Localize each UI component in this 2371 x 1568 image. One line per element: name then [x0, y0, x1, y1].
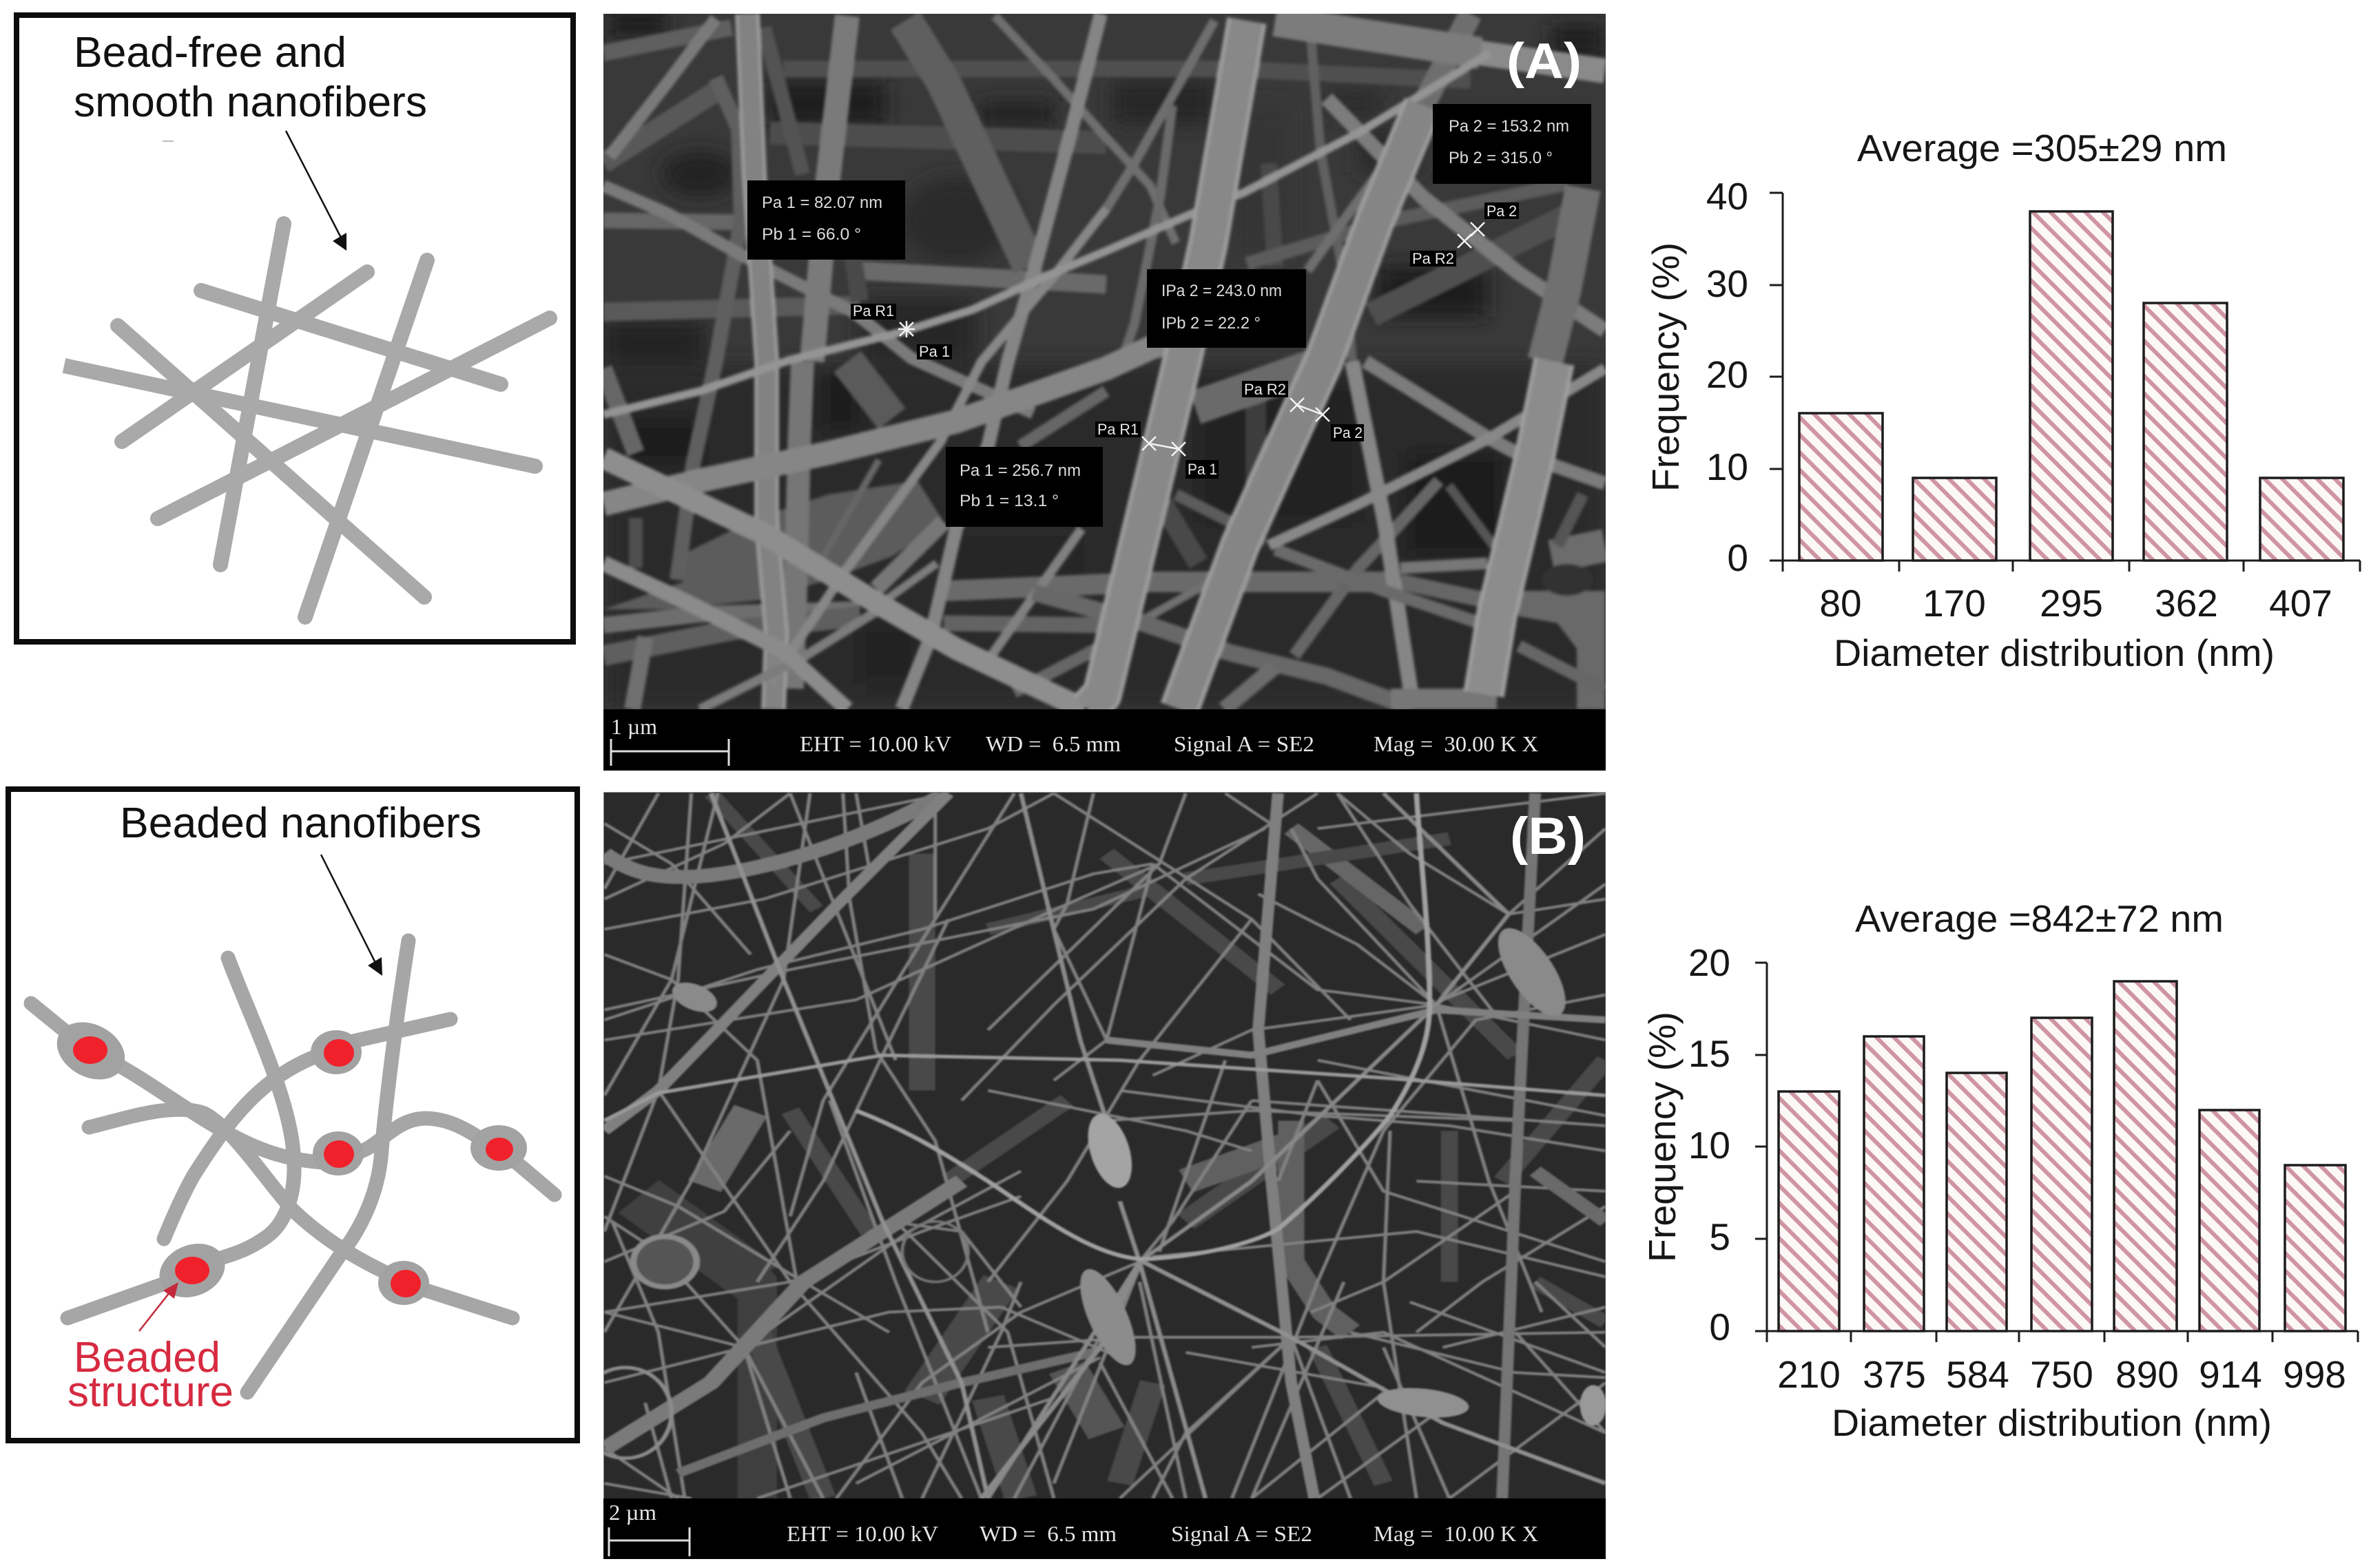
micrograph info bar A: [603, 709, 1606, 771]
measurement box: Pa 2 = 243.0 nm: IPa 2 = 243.0 nm: [1161, 282, 1282, 300]
micrograph info bar B: [603, 1498, 1606, 1559]
point labels on micrograph: Pa R1: [853, 302, 894, 320]
measurement box: Pa 1 = 256.7 nm: [946, 447, 1103, 527]
x tick labels B: 375: [1863, 1353, 1926, 1396]
measurement box: Pa 1 = 82.07 nm: Pb 1 = 66.0 °: [762, 225, 861, 244]
y tick labels B: 20: [1688, 941, 1730, 984]
point labels on micrograph: Pa R2: [1412, 250, 1454, 267]
panel: beaded schematic: [8, 789, 577, 1441]
measurement box: Pa 1 = 256.7 nm: Pb 1 = 13.1 °: [960, 492, 1059, 510]
panel: SEM micrograph A: [603, 10, 1606, 771]
y tick labels A: 20: [1706, 353, 1748, 396]
y tick labels A: 40: [1706, 175, 1748, 218]
micrograph fibers B: [579, 792, 1606, 1498]
point labels on micrograph: Pa 1: [1188, 461, 1217, 478]
x tick labels A: 407: [2269, 582, 2332, 625]
measurement cross markers: [898, 222, 1484, 456]
micrograph info bar A: Signal A = SE2: [1174, 731, 1314, 756]
x tick labels B: 210: [1777, 1353, 1841, 1396]
heading: bead-free and smooth nanofibers: Bead-free and: [74, 29, 346, 76]
x tick labels B: 914: [2199, 1353, 2262, 1396]
measurement box: Pa 2 = 153.2 nm: [1433, 104, 1591, 184]
bar chart B: diameter distribution: [1641, 897, 2358, 1444]
label: beaded structure: Beaded: [74, 1334, 220, 1381]
heading: beaded nanofibers: Beaded nanofibers: [120, 799, 482, 847]
chart title A: Average =305±29 nm: [1857, 127, 2227, 169]
micrograph info bar B: WD = 6.5 mm: [980, 1521, 1117, 1546]
x tick labels B: 750: [2030, 1353, 2093, 1396]
x tick labels A: 295: [2040, 582, 2103, 625]
point labels on micrograph: Pa 1: [919, 343, 950, 360]
micrograph info bar A: WD = 6.5 mm: [986, 731, 1121, 756]
y tick labels B: 0: [1709, 1306, 1730, 1348]
y tick labels B: [1688, 941, 1730, 1348]
axes A: [1770, 193, 2360, 572]
panel letter B: (B): [1510, 807, 1586, 866]
y tick labels A: 30: [1706, 262, 1748, 305]
y tick labels B: 5: [1709, 1215, 1730, 1258]
point labels on micrograph: Pa R2: [1244, 381, 1286, 398]
micrograph info bar A: Mag = 30.00 K X: [1374, 731, 1538, 756]
x tick labels B: 584: [1946, 1353, 2009, 1396]
bar chart A: diameter distribution: [1644, 127, 2360, 674]
label: beaded structure: structure: [68, 1368, 234, 1416]
point labels on micrograph: Pa 2: [1487, 202, 1517, 220]
x tick labels A: [1819, 582, 2332, 625]
y tick labels A: [1706, 175, 1748, 579]
bars A: [1799, 211, 2343, 561]
micrograph info bar B: Mag = 10.00 K X: [1374, 1521, 1538, 1546]
red arrow to bead: [139, 1282, 178, 1331]
y axis title A: Frequency (%): [1644, 242, 1687, 492]
y tick labels A: 0: [1727, 536, 1748, 579]
x tick labels B: 998: [2283, 1353, 2346, 1396]
schematic frame: [8, 789, 577, 1441]
y tick labels B: 15: [1688, 1032, 1730, 1075]
measurement box: Pa 1 = 256.7 nm: Pa 1 = 256.7 nm: [960, 461, 1081, 480]
micrograph info bar B: EHT = 10.00 kV: [787, 1521, 938, 1546]
bars B: [1779, 981, 2346, 1331]
micrograph info bar B: 2 µm: [609, 1500, 656, 1525]
measurement box: Pa 2 = 243.0 nm: [1147, 269, 1306, 348]
x axis title B: Diameter distribution (nm): [1832, 1401, 2272, 1444]
panel: SEM micrograph B: [579, 792, 1606, 1559]
measurement box: Pa 1 = 82.07 nm: [747, 180, 905, 260]
panel: bead-free schematic: [17, 15, 573, 642]
x tick labels B: 890: [2115, 1353, 2179, 1396]
measurement box: Pa 2 = 243.0 nm: IPb 2 = 22.2 °: [1161, 314, 1261, 333]
arrow to fibers: [286, 131, 346, 251]
heading: bead-free and smooth nanofibers: smooth nanofibers: [74, 79, 427, 126]
y tick labels B: 10: [1688, 1124, 1730, 1167]
measurement box: Pa 2 = 153.2 nm: Pb 2 = 315.0 °: [1449, 149, 1553, 167]
x tick labels A: 170: [1923, 582, 1986, 625]
chart title B: Average =842±72 nm: [1855, 897, 2224, 940]
beads with red cores: [47, 1011, 527, 1307]
axes B: [1755, 963, 2358, 1342]
micrograph info bar A: 1 µm: [611, 714, 657, 739]
beaded fiber network: [31, 941, 555, 1392]
x tick labels A: 80: [1819, 582, 1862, 625]
point labels on micrograph: [851, 202, 1519, 479]
micrograph info bar A: EHT = 10.00 kV: [800, 731, 951, 756]
arrow to beaded fibers: [321, 855, 382, 976]
point labels on micrograph: Pa 2: [1333, 424, 1363, 441]
schematic frame: [17, 15, 573, 642]
panel letter A: (A): [1507, 34, 1582, 89]
point labels on micrograph: Pa R1: [1097, 421, 1139, 438]
x tick labels A: 362: [2155, 582, 2218, 625]
y axis title B: Frequency (%): [1641, 1012, 1684, 1262]
smooth fiber network: [64, 224, 550, 617]
y tick labels A: 10: [1706, 446, 1748, 488]
micrograph info bar B: Signal A = SE2: [1171, 1521, 1312, 1546]
micrograph fibers A: [603, 10, 1606, 709]
measurement box: Pa 2 = 153.2 nm: Pa 2 = 153.2 nm: [1449, 117, 1569, 136]
x axis title A: Diameter distribution (nm): [1834, 631, 2275, 674]
measurement box: Pa 1 = 82.07 nm: Pa 1 = 82.07 nm: [762, 194, 882, 212]
x tick labels B: [1777, 1353, 2346, 1396]
